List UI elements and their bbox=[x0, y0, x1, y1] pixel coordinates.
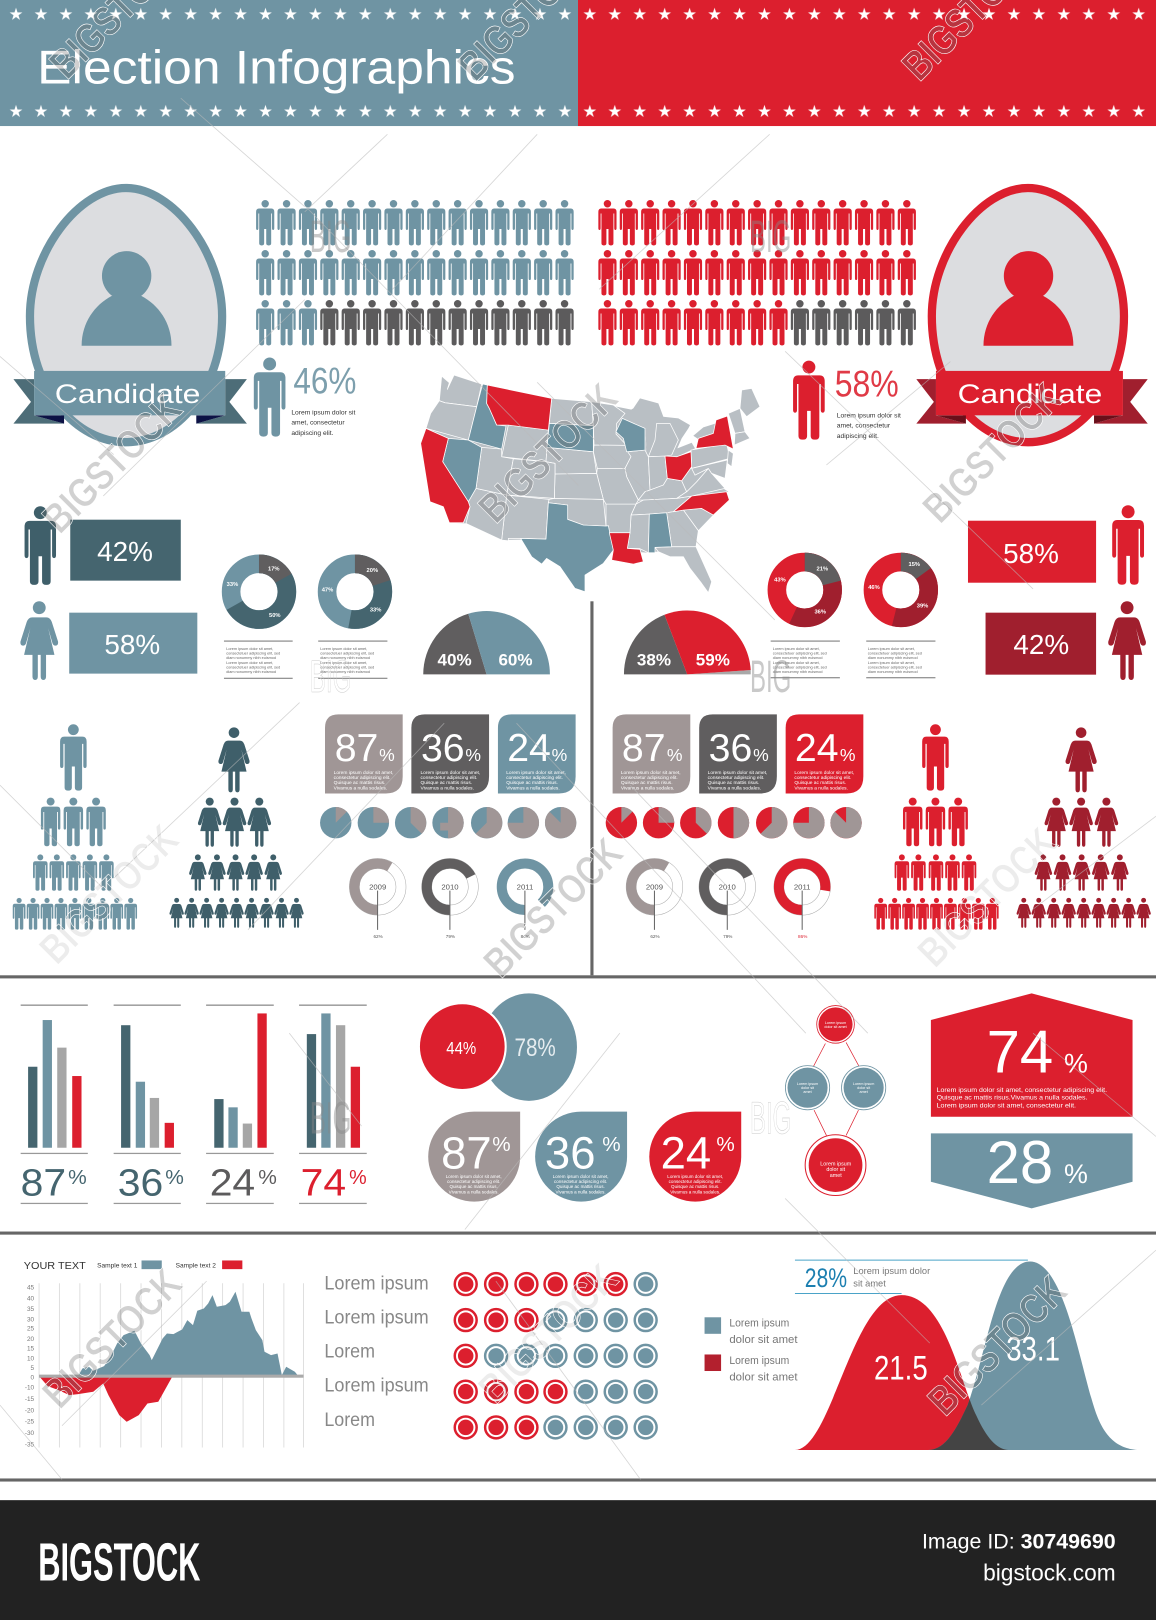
y axis labels: 20 bbox=[27, 1336, 35, 1343]
pyramid: left men bbox=[13, 724, 137, 930]
text block: under left donuts: diam nonummy nibh euismod bbox=[226, 670, 276, 674]
gender stats: right: 42% bbox=[1013, 629, 1069, 660]
stat: 58 percent: adipiscing elit. bbox=[837, 433, 879, 440]
stat: 46 percent bbox=[254, 357, 356, 437]
map: United States bbox=[421, 375, 760, 593]
bar chart: 24 percent: 24 bbox=[210, 1161, 255, 1204]
text block: under left donuts: consectetuer adipiscing elit, sed bbox=[320, 652, 374, 656]
stat cards: right: Lorem ipsum dolor sit amet, bbox=[794, 770, 854, 776]
droplet: 87 percent: Lorem ipsum dolor sit amet, bbox=[446, 1174, 502, 1179]
callout: 74 percent: Lorem ipsum dolor sit amet, consectetur adipiscing elit. bbox=[937, 1087, 1107, 1094]
network diagram: Lorem ipsum bbox=[825, 1021, 846, 1025]
list labels: Lorem bbox=[324, 1341, 375, 1363]
venn diagram bbox=[419, 993, 577, 1101]
half pie: right: 59% bbox=[696, 650, 730, 669]
section dividers bbox=[0, 975, 1156, 1482]
text block: under right donuts: Lorem ipsum dolor sit amet, bbox=[868, 661, 915, 665]
half pie: left: 40% bbox=[438, 650, 472, 669]
text block: under left donuts: consectetuer adipiscing elit, sed bbox=[226, 665, 280, 669]
y axis labels: -30 bbox=[25, 1430, 35, 1437]
donut chart: left 2: 33% bbox=[370, 608, 381, 614]
text block: under left donuts bbox=[224, 641, 387, 679]
y axis labels: 0 bbox=[31, 1374, 35, 1381]
stat cards: left: % bbox=[379, 745, 395, 765]
donut chart: right 1: 36% bbox=[814, 610, 826, 616]
donut chart: left 1: 33% bbox=[227, 582, 238, 588]
vertical divider bbox=[590, 601, 593, 975]
text block: under right donuts: diam nonummy nibh euismod bbox=[868, 656, 918, 660]
text block: under left donuts: diam nonummy nibh euismod bbox=[320, 670, 370, 674]
bar chart: 36 percent: % bbox=[165, 1166, 184, 1189]
gender stats: left: 58% bbox=[104, 629, 160, 660]
text block: under right donuts: consectetuer adipiscing elit, sed bbox=[773, 652, 827, 656]
stat cards: right: 24 bbox=[795, 726, 839, 770]
stat cards: left: Lorem ipsum dolor sit amet, bbox=[506, 770, 566, 776]
watermarks: BIGSTOCK bbox=[34, 1260, 190, 1417]
bar chart: 87 percent bbox=[21, 1005, 88, 1204]
watermark: BIG marks: BIG bbox=[750, 1092, 791, 1143]
yearly rings: right: 2011 bbox=[794, 883, 810, 892]
watermarks: BIGSTOCK bbox=[919, 1267, 1076, 1424]
droplet: 24 percent: 24 bbox=[661, 1128, 711, 1179]
list labels: Lorem ipsum bbox=[324, 1272, 429, 1294]
network diagram: Lorem ipsum bbox=[853, 1082, 874, 1086]
small pies: right bbox=[606, 807, 862, 838]
donut chart: left 1: 17% bbox=[268, 566, 280, 572]
watermarks: BIGSTOCK bbox=[914, 375, 1071, 531]
droplet: 36 percent: % bbox=[602, 1133, 621, 1156]
bar chart: 24 percent: % bbox=[258, 1166, 277, 1189]
network diagram: dolor sit bbox=[801, 1086, 814, 1090]
bell chart callout: sit amet bbox=[853, 1278, 886, 1288]
pyramid: right men bbox=[874, 724, 999, 930]
venn diagram: 44% bbox=[446, 1038, 476, 1058]
donut chart: right 1: 21% bbox=[817, 566, 828, 572]
chart header: Sample text 1 bbox=[97, 1263, 138, 1270]
droplet: 36 percent: Quisque ac mattis risus. bbox=[556, 1184, 605, 1189]
watermark: BIG marks: BIG bbox=[310, 211, 351, 262]
network diagram: Lorem ipsum bbox=[797, 1082, 818, 1086]
stat cards: right bbox=[613, 714, 863, 793]
half pie: right: 38% bbox=[637, 650, 671, 669]
stat cards: right: Quisque ac mattis risus. bbox=[794, 780, 846, 786]
chart header: Sample text 2 bbox=[176, 1263, 216, 1270]
text block: under left donuts: Lorem ipsum dolor sit amet, bbox=[320, 661, 367, 665]
stat: 46 percent: amet, consectetur bbox=[291, 420, 345, 427]
watermark: BIG marks bbox=[310, 211, 791, 1143]
watermark: BIG marks: BIG bbox=[310, 1092, 351, 1143]
footer bar: bigstock.com bbox=[983, 1560, 1116, 1586]
panel: left candidate badge: Candidate bbox=[55, 379, 200, 409]
donut chart: right 2: 39% bbox=[917, 603, 928, 610]
list labels: Lorem bbox=[324, 1409, 375, 1431]
y axis labels: -10 bbox=[25, 1385, 35, 1392]
y axis labels: 40 bbox=[27, 1296, 35, 1303]
stat: 58 percent bbox=[793, 361, 901, 440]
donut chart: right 1: 43% bbox=[774, 578, 786, 584]
donut chart: right 1 bbox=[774, 562, 833, 618]
stat cards: right: 36 bbox=[709, 726, 752, 770]
watermarks: BIGSTOCK bbox=[470, 1255, 626, 1412]
stat cards: left: Quisque ac mattis risus. bbox=[334, 780, 385, 786]
bell chart callout: 28% bbox=[805, 1263, 847, 1293]
small pies: left bbox=[320, 807, 576, 838]
y axis labels: 10 bbox=[27, 1356, 35, 1363]
dot rating matrix bbox=[455, 1273, 657, 1438]
area series bbox=[39, 1292, 298, 1422]
yearly rings: left: 62% bbox=[373, 934, 383, 939]
bar chart: 87 percent: 87 bbox=[21, 1161, 66, 1204]
watermark: BIG marks: BIG bbox=[750, 651, 791, 702]
droplet: 24 percent: Quisque ac mattis risus. bbox=[671, 1184, 719, 1189]
text block: under right donuts: consectetuer adipiscing elit, sed bbox=[868, 665, 922, 669]
list labels: Lorem ipsum bbox=[324, 1375, 429, 1397]
stat cards: right: Lorem ipsum dolor sit amet, bbox=[708, 770, 767, 776]
droplet: 36 percent: 36 bbox=[545, 1128, 595, 1179]
bell curves: 33.1 bbox=[1006, 1331, 1060, 1369]
callout: 74 percent: 74 bbox=[987, 1019, 1053, 1086]
droplet: 24 percent: consectetur adipiscing elit. bbox=[669, 1179, 722, 1184]
donut chart: left 1: 50% bbox=[269, 613, 281, 619]
bell curves: 21.5 bbox=[874, 1349, 928, 1387]
legend: dolor sit amet bbox=[729, 1371, 798, 1383]
footer bar: Image ID: 30749690 bbox=[922, 1530, 1116, 1554]
stat cards: left: 87 bbox=[335, 726, 378, 770]
text block: under left donuts: Lorem ipsum dolor sit amet, bbox=[320, 647, 367, 651]
stat: 58 percent: 58% bbox=[835, 363, 899, 405]
stat: 46 percent: adipiscing elit. bbox=[291, 430, 334, 437]
watermark: BIG marks: BIG bbox=[310, 651, 351, 702]
stat cards: left: Vivamus a nulla sodales. bbox=[334, 785, 387, 791]
droplet: 87 percent: 87 bbox=[441, 1128, 492, 1179]
callout: 74 percent bbox=[931, 993, 1133, 1117]
text block: under left donuts: Lorem ipsum dolor sit amet, bbox=[226, 661, 273, 665]
stat cards: left: 24 bbox=[507, 726, 551, 770]
list labels: Lorem ipsum bbox=[324, 1306, 429, 1328]
stat: 58 percent: amet, consectetur bbox=[837, 423, 891, 430]
half pie: left: 60% bbox=[498, 650, 533, 669]
text block: under right donuts: diam nonummy nibh euismod bbox=[868, 670, 918, 674]
stat cards: left: 36 bbox=[421, 726, 465, 770]
text block: under left donuts: Lorem ipsum dolor sit amet, bbox=[226, 647, 273, 651]
gender stats: right bbox=[968, 505, 1146, 680]
stat cards: right: % bbox=[667, 745, 682, 765]
stat cards: left: Lorem ipsum dolor sit amet, bbox=[420, 770, 480, 776]
text block: under left donuts: consectetuer adipiscing elit, sed bbox=[320, 665, 374, 669]
stat cards: left: Quisque ac mattis risus. bbox=[506, 780, 558, 786]
legend bbox=[705, 1317, 798, 1383]
stat cards: left: Quisque ac mattis risus. bbox=[420, 780, 472, 786]
stat cards: left: Vivamus a nulla sodales. bbox=[420, 785, 474, 791]
y axis labels: -25 bbox=[25, 1419, 35, 1426]
yearly rings: right: 86% bbox=[798, 934, 807, 939]
stat cards: left bbox=[325, 714, 576, 793]
donut chart: right 2: 46% bbox=[868, 585, 880, 591]
yearly rings: right: 79% bbox=[723, 934, 732, 939]
stat cards: right: consectetur adipiscing elit. bbox=[708, 775, 764, 781]
y axis labels: 30 bbox=[27, 1316, 35, 1323]
y axis labels: -20 bbox=[25, 1407, 35, 1414]
title: Election Infographics bbox=[37, 42, 515, 95]
venn diagram: 78% bbox=[514, 1035, 556, 1062]
stat cards: right: consectetur adipiscing elit. bbox=[621, 775, 678, 781]
bell chart callout bbox=[795, 1260, 1028, 1294]
stat cards: left: consectetur adipiscing elit. bbox=[334, 775, 390, 781]
callout: 28 percent: % bbox=[1064, 1159, 1088, 1189]
yearly rings: left: 2011 bbox=[517, 883, 533, 892]
droplet: 24 percent bbox=[649, 1112, 741, 1202]
stat cards: right: % bbox=[753, 745, 769, 765]
text block: under right donuts: Lorem ipsum dolor sit amet, bbox=[868, 647, 915, 651]
panel: right candidate badge: Candidate bbox=[958, 379, 1102, 409]
stat cards: right: Quisque ac mattis risus. bbox=[621, 780, 673, 786]
y axis labels: 25 bbox=[27, 1326, 35, 1333]
pyramid: right women bbox=[1017, 727, 1151, 928]
watermarks: BIGSTOCK bbox=[909, 819, 1065, 976]
stat: 46 percent: 46% bbox=[293, 360, 356, 402]
bar chart: 24 percent bbox=[206, 1005, 277, 1204]
legend: Lorem ipsum bbox=[729, 1318, 789, 1330]
stat cards: right: consectetur adipiscing elit. bbox=[794, 775, 851, 781]
text block: under right donuts: consectetuer adipiscing elit, sed bbox=[868, 652, 922, 656]
text block: under right donuts: diam nonummy nibh euismod bbox=[773, 656, 823, 660]
text block: under right donuts: Lorem ipsum dolor sit amet, bbox=[773, 661, 820, 665]
droplet: 87 percent bbox=[428, 1112, 520, 1202]
donut chart: left 2: 20% bbox=[367, 568, 378, 574]
area chart bbox=[24, 1260, 304, 1448]
gender stats: left bbox=[20, 506, 197, 680]
donut chart: left 1 bbox=[227, 564, 287, 620]
bar chart: 36 percent bbox=[114, 1005, 184, 1204]
bell chart callout: Lorem ipsum dolor bbox=[853, 1266, 930, 1276]
bar chart: 87 percent: % bbox=[68, 1166, 87, 1189]
bar chart: 74 percent bbox=[299, 1005, 367, 1204]
stat cards: right: Vivamus a nulla sodales. bbox=[708, 785, 761, 791]
footer bar bbox=[0, 1500, 1156, 1620]
bar chart: 74 percent: 74 bbox=[301, 1161, 346, 1204]
stat cards: right: % bbox=[840, 745, 855, 765]
y axis labels: -15 bbox=[25, 1396, 35, 1403]
droplet: 36 percent: Vivamus a nulla sodales. bbox=[556, 1189, 606, 1194]
stat cards: right: 87 bbox=[622, 726, 666, 770]
stat: 46 percent: Lorem ipsum dolor sit bbox=[291, 409, 356, 416]
droplet: 87 percent: consectetur adipiscing elit. bbox=[447, 1179, 500, 1184]
callout: 28 percent bbox=[931, 1129, 1133, 1208]
network diagram: amet bbox=[803, 1090, 812, 1094]
stat cards: left: consectetur adipiscing elit. bbox=[506, 775, 563, 781]
droplet: 36 percent: consectetur adipiscing elit. bbox=[554, 1179, 607, 1184]
half pie: left bbox=[423, 611, 550, 674]
pyramid: left women bbox=[169, 727, 304, 928]
panel: right candidate badge bbox=[916, 188, 1148, 442]
stat cards: left: % bbox=[465, 745, 481, 765]
bar chart: 74 percent: % bbox=[349, 1166, 367, 1189]
half pie: right bbox=[624, 610, 751, 674]
droplet: 24 percent: Lorem ipsum dolor sit amet, bbox=[667, 1174, 723, 1179]
legend: Lorem ipsum bbox=[729, 1355, 789, 1367]
droplet: 36 percent bbox=[535, 1112, 627, 1202]
y axis labels: -35 bbox=[25, 1441, 35, 1448]
y axis labels bbox=[25, 1284, 35, 1448]
watermarks: BIGSTOCK bbox=[475, 829, 632, 986]
network diagram: amet bbox=[860, 1090, 868, 1094]
network diagram: dolor sit bbox=[826, 1167, 846, 1173]
watermarks: BIGSTOCK bbox=[31, 816, 187, 972]
yearly rings: left bbox=[349, 858, 548, 939]
text block: under right donuts bbox=[771, 641, 935, 678]
yearly rings: right: 2009 bbox=[646, 883, 663, 892]
header banner bbox=[0, 0, 1156, 126]
people grid: right bbox=[598, 200, 916, 345]
stat cards: right: Vivamus a nulla sodales. bbox=[621, 785, 674, 791]
yearly rings: left: 2009 bbox=[369, 883, 386, 892]
text block: under left donuts: diam nonummy nibh euismod bbox=[226, 656, 276, 660]
text block: under right donuts: diam nonummy nibh euismod bbox=[773, 670, 823, 674]
donut chart: left 2: 47% bbox=[322, 587, 333, 593]
text block: under right donuts: Lorem ipsum dolor sit amet, bbox=[773, 647, 820, 651]
watermark: BIG marks: BIG bbox=[750, 211, 791, 262]
callout: 74 percent: Lorem ipsum dolor sit amet, consectetur elit. bbox=[937, 1103, 1076, 1110]
list labels bbox=[324, 1272, 429, 1431]
droplet: 87 percent: Quisque ac mattis risus. bbox=[449, 1184, 498, 1189]
stat cards: right: Quisque ac mattis risus. bbox=[708, 780, 759, 786]
yearly rings: left: 2010 bbox=[441, 883, 459, 892]
chart header: YOUR TEXT bbox=[24, 1261, 86, 1272]
droplet: 24 percent: % bbox=[716, 1133, 735, 1156]
stat: 58 percent: Lorem ipsum dolor sit bbox=[837, 412, 901, 419]
yearly rings: right: 2010 bbox=[719, 883, 736, 892]
legend: dolor sit amet bbox=[729, 1334, 798, 1346]
yearly rings: right: 62% bbox=[650, 934, 660, 939]
network diagram: dolor sit bbox=[857, 1086, 870, 1090]
chart header bbox=[24, 1260, 242, 1272]
callout: 74 percent: Quisque ac mattis risus.Vivamus a nulla sodales. bbox=[937, 1095, 1088, 1102]
bar chart: 36 percent: 36 bbox=[118, 1161, 163, 1204]
callout: 74 percent: % bbox=[1064, 1049, 1088, 1079]
watermarks: BIGSTOCK bbox=[470, 375, 626, 531]
footer bar: BIGSTOCK bbox=[38, 1533, 201, 1593]
y axis labels: 5 bbox=[31, 1365, 35, 1372]
droplet: 87 percent: % bbox=[492, 1133, 511, 1156]
y axis labels: 45 bbox=[27, 1284, 35, 1291]
network diagram bbox=[785, 1006, 886, 1195]
stat cards: left: consectetur adipiscing elit. bbox=[420, 775, 477, 781]
people grid: left bbox=[256, 200, 574, 345]
stat cards: left: % bbox=[552, 745, 567, 765]
gender stats: left: 42% bbox=[97, 536, 153, 567]
text block: under right donuts: consectetuer adipiscing elit, sed bbox=[773, 665, 827, 669]
yearly rings: left: 86% bbox=[521, 934, 530, 939]
droplet: 87 percent: Vivamus a nulla sodales. bbox=[449, 1189, 499, 1194]
donut chart: right 2 bbox=[868, 562, 929, 618]
yearly rings: right bbox=[626, 858, 830, 939]
donut chart: left 2 bbox=[322, 564, 383, 620]
stat cards: left: Lorem ipsum dolor sit amet, bbox=[334, 770, 393, 776]
watermarks bbox=[31, 0, 1076, 1424]
network diagram: Lorem ipsum bbox=[820, 1161, 852, 1167]
y axis labels: 15 bbox=[27, 1345, 35, 1352]
y axis labels: 35 bbox=[27, 1306, 35, 1313]
network diagram: dolor sit amet bbox=[824, 1025, 847, 1029]
stat cards: right: Vivamus a nulla sodales. bbox=[794, 785, 848, 791]
bell curves bbox=[795, 1261, 1137, 1450]
network diagram: amet bbox=[830, 1173, 842, 1179]
watermarks: BIGSTOCK bbox=[34, 385, 190, 542]
stat cards: right: Lorem ipsum dolor sit amet, bbox=[621, 770, 681, 776]
text block: under left donuts: consectetuer adipiscing elit, sed bbox=[226, 652, 280, 656]
text block: under left donuts: diam nonummy nibh euismod bbox=[320, 656, 370, 660]
droplet: 36 percent: Lorem ipsum dolor sit amet, bbox=[553, 1174, 609, 1179]
stat cards: left: Vivamus a nulla sodales. bbox=[506, 785, 560, 791]
panel: left candidate badge bbox=[13, 188, 247, 442]
callout: 28 percent: 28 bbox=[987, 1129, 1053, 1196]
yearly rings: left: 79% bbox=[446, 934, 455, 939]
droplet: 24 percent: Vivamus a nulla sodales. bbox=[670, 1189, 720, 1194]
donut chart: right 2: 15% bbox=[908, 562, 920, 568]
gender stats: right: 58% bbox=[1003, 538, 1059, 569]
